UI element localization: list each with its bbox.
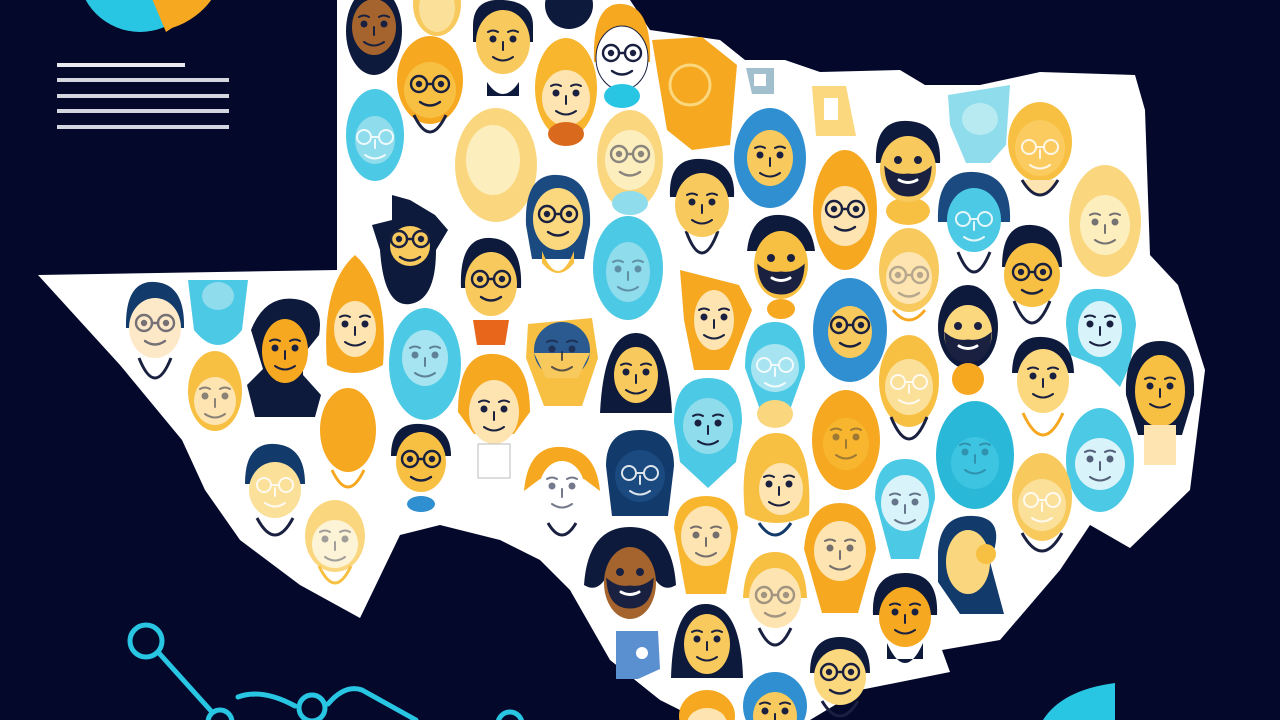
face 61: [743, 552, 807, 645]
face 14: [813, 150, 877, 270]
face 9: [734, 108, 806, 208]
face 27: [680, 270, 752, 370]
face 3: [473, 0, 533, 96]
face 34: [326, 255, 384, 373]
face 7: [535, 38, 597, 146]
face 47: [936, 401, 1014, 509]
face 46: [812, 390, 880, 490]
face 11: [455, 108, 537, 222]
face 42: [1126, 341, 1194, 465]
face 21: [526, 175, 590, 273]
face 40: [879, 335, 939, 439]
face 57: [938, 516, 1004, 614]
face 64: [810, 637, 870, 716]
face 26: [461, 238, 521, 345]
face 15: [876, 121, 940, 225]
face 45: [674, 378, 742, 488]
doodle: small grey portrait: [746, 68, 774, 94]
face 62: [873, 573, 937, 663]
face 31: [126, 282, 184, 378]
legend lines: [57, 65, 229, 127]
face 22: [593, 216, 663, 320]
face 38: [600, 333, 672, 413]
face 66: [679, 690, 735, 720]
face 53: [606, 430, 674, 516]
face 41: [1012, 337, 1074, 435]
face 35: [389, 308, 461, 420]
face 6: [397, 36, 463, 132]
face 63: [671, 604, 743, 678]
face 32: [188, 280, 248, 345]
face 60: [584, 527, 676, 619]
face 49: [391, 424, 451, 512]
face 5: [594, 4, 650, 108]
face 33: [247, 299, 321, 417]
face 59: [804, 503, 876, 613]
face 30: [1066, 289, 1136, 387]
network chart: bottom: [130, 625, 522, 720]
face 37: [458, 354, 530, 478]
face 12: [597, 110, 663, 215]
face 19: [938, 172, 1010, 272]
face 18: [1069, 165, 1141, 277]
face 65: [743, 672, 807, 720]
face 67: [616, 631, 660, 679]
face 39: [745, 322, 805, 428]
face 56: [1012, 453, 1072, 551]
face 48: [1066, 408, 1134, 512]
doodle: small gold portrait: [812, 86, 856, 136]
face 51: [305, 500, 365, 583]
face 29: [938, 285, 998, 395]
face 55: [875, 459, 935, 559]
face 10: [346, 89, 404, 181]
face 17: [1008, 102, 1072, 195]
face 13: [670, 159, 734, 253]
face 25: [372, 195, 448, 304]
face 50: [245, 444, 305, 535]
face 43: [188, 351, 242, 431]
face 8: [652, 37, 737, 150]
face 52: [524, 447, 600, 535]
face 1: [346, 0, 402, 75]
face 54: [744, 433, 809, 535]
face 2: [413, 0, 461, 36]
face 36: [526, 318, 598, 406]
face 20: [1002, 225, 1062, 323]
face 58: [674, 496, 738, 594]
pie chart: bottom right: [1043, 683, 1115, 720]
face 28: [813, 278, 887, 382]
face 23: [747, 215, 815, 319]
pie chart: top left: [78, 0, 218, 32]
face 24: [879, 228, 939, 320]
face 44: [320, 388, 376, 487]
face 16: [948, 85, 1010, 163]
face 4: [545, 0, 593, 29]
